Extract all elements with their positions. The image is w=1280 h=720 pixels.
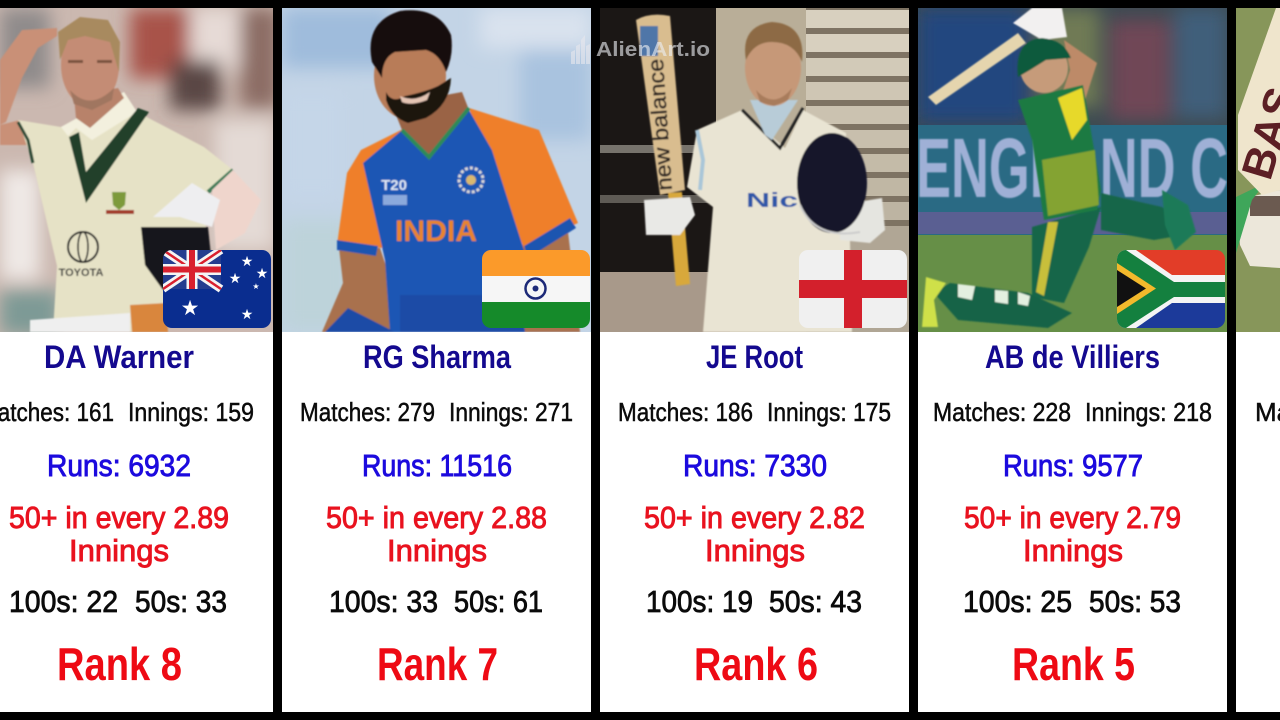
bat (928, 33, 1026, 105)
card: RG Sharma stats: RG Sharma (363, 339, 511, 375)
head and helmet (1020, 43, 1068, 93)
card: JE Root stats: 50s: 43 (769, 584, 862, 619)
panel: AB de Villiers (916, 8, 1228, 712)
India text: INDIA (395, 215, 477, 248)
card: AB de Villiers stats: Innings: 218 (1085, 397, 1212, 427)
card: partial stats (1236, 332, 1280, 712)
watermark: AlienArt.io (571, 35, 710, 64)
photo: partial player (1233, 8, 1280, 332)
card: DA Warner stats: Innings (69, 533, 169, 568)
raised arm (0, 28, 57, 125)
trousers (325, 295, 525, 332)
Toyota logo (68, 232, 98, 262)
shoe (922, 277, 946, 327)
card: AB de Villiers stats: AB de Villiers (985, 339, 1160, 375)
card: AB de Villiers stats: 50s: 53 (1089, 584, 1181, 619)
torso (1018, 85, 1101, 220)
helmet (797, 133, 867, 233)
photo: AB de Villiers (916, 8, 1228, 332)
forearm (212, 170, 261, 250)
card: DA Warner stats: Rank 8 (57, 638, 182, 690)
bat handle (30, 313, 130, 332)
sleeve stripe (208, 170, 233, 192)
flag: South Africa (1117, 250, 1225, 328)
flag: India (482, 250, 590, 328)
front leg (1032, 207, 1101, 303)
card: RG Sharma stats: Innings (387, 533, 487, 568)
gloves (1013, 8, 1067, 40)
card: JE Root stats: 50+ in every 2.82 (644, 500, 865, 535)
back leg (1101, 193, 1195, 240)
shirt (687, 110, 852, 332)
flag: Australia (163, 250, 271, 328)
card: RG Sharma stats: Runs: 11516 (362, 448, 512, 483)
arm (1060, 40, 1097, 100)
card: AB de Villiers stats: Rank 5 (1012, 638, 1135, 690)
stadium steps (806, 8, 909, 332)
panel: partial next player (1233, 8, 1280, 712)
card: AB de Villiers stats: Innings (1023, 533, 1123, 568)
card: AB de Villiers stats (918, 332, 1227, 712)
panel: JE Root (600, 8, 909, 712)
card: RG Sharma stats: 50s: 61 (454, 584, 543, 619)
neck (392, 92, 469, 157)
jersey (363, 110, 524, 332)
panel: DA Warner (0, 8, 280, 712)
flag: Australia: ★ (241, 253, 253, 269)
arms (321, 247, 391, 332)
flag: Australia: ★ (229, 270, 241, 286)
shirt (18, 116, 232, 332)
head (744, 42, 802, 106)
card: JE Root stats (600, 332, 909, 712)
flag: Australia: ★ (181, 297, 199, 320)
photo: JE Root: new balance (643, 58, 677, 191)
watermark: AlienArt.io: AlienArt.io (596, 39, 710, 61)
photo: RG Sharma (282, 8, 591, 332)
card: RG Sharma stats: Rank 7 (377, 638, 498, 690)
card: JE Root stats: JE Root (706, 339, 803, 375)
photo: DA Warner: TOYOTA (59, 267, 103, 279)
card: JE Root stats: 100s: 19 (646, 584, 753, 619)
head (60, 36, 120, 100)
panel: RG Sharma (282, 8, 591, 712)
sleeves (336, 128, 402, 249)
flag: Australia: ★ (241, 306, 253, 322)
photo: JE Root (600, 8, 909, 332)
card: RG Sharma stats: 100s: 33 (329, 584, 438, 619)
photo: DA Warner (0, 8, 280, 335)
helmet and gloves (140, 226, 212, 291)
bat (636, 15, 685, 195)
collar (61, 92, 137, 140)
face (373, 48, 448, 117)
card: RG Sharma stats: Matches: 279 (300, 397, 435, 427)
V neck (69, 108, 149, 203)
lower leg on ground (934, 283, 1072, 328)
sponsor: Nic (746, 190, 798, 212)
flag: Australia: ★ (256, 265, 268, 281)
card: DA Warner stats: 50s: 33 (135, 584, 227, 619)
card: AB de Villiers stats: Matches: 228 (933, 397, 1071, 427)
gloves (644, 197, 695, 235)
card: AB de Villiers stats: Runs: 9577 (1003, 448, 1143, 483)
card: JE Root stats: Innings (705, 533, 805, 568)
flag: Australia: ★ (252, 282, 260, 291)
card: DA Warner stats: 50+ in every 2.89 (9, 500, 229, 535)
card: JE Root stats: Innings: 175 (767, 397, 891, 427)
crest (459, 168, 483, 192)
card: DA Warner stats (0, 332, 273, 712)
card: DA Warner stats: 100s: 22 (9, 584, 118, 619)
card: RG Sharma stats (282, 332, 591, 712)
card: RG Sharma stats: Innings: 271 (449, 397, 573, 427)
card: DA Warner stats: Innings: 159 (128, 397, 254, 427)
card: RG Sharma stats: 50+ in every 2.88 (326, 500, 547, 535)
card: JE Root stats: Matches: 186 (618, 397, 753, 427)
Cricket Australia crest (112, 192, 126, 210)
card: JE Root stats: Rank 6 (694, 638, 818, 690)
card: AB de Villiers stats: 100s: 25 (963, 584, 1072, 619)
card: AB de Villiers stats: 50+ in every 2.79 (964, 500, 1181, 535)
card: DA Warner stats: Runs: 6932 (47, 448, 191, 483)
card: JE Root stats: Runs: 7330 (683, 448, 827, 483)
T20 logo: T20 (381, 177, 407, 194)
neck (74, 88, 124, 128)
card: DA Warner stats: DA Warner (44, 339, 194, 375)
flag: England (799, 250, 907, 328)
